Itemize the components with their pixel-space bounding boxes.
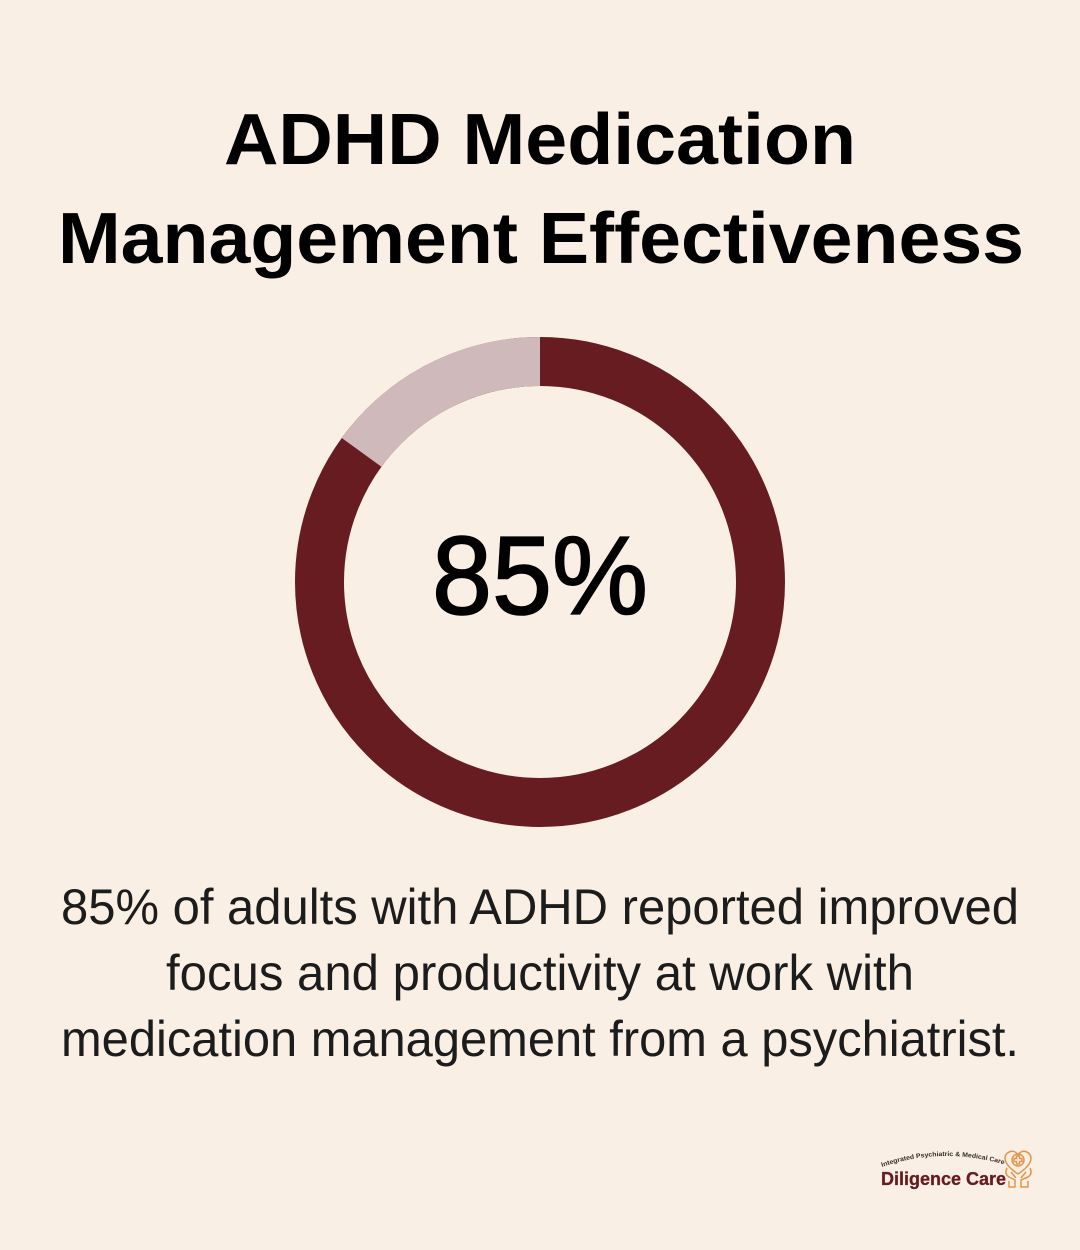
logo: Diligence Care (881, 1150, 1032, 1190)
logo tagline (882, 1156, 1006, 1167)
donut chart: 85% (320, 362, 760, 802)
title: Management Effectiveness (58, 198, 1024, 279)
description text (61, 879, 1019, 1067)
description text: medication management from a psychiatrist. (61, 1011, 1019, 1067)
logo: Diligence Care: Integrated Psychiatric & Medical Care (881, 1151, 1004, 1167)
donut value: 85% (432, 514, 648, 638)
description text: focus and productivity at work with (166, 945, 914, 1001)
logo icon: heart in hands (1005, 1151, 1031, 1187)
description text: 85% of adults with ADHD reported improved (61, 879, 1019, 935)
title (58, 99, 1024, 279)
logo name: Diligence Care (881, 1169, 1006, 1189)
title: ADHD Medication (224, 99, 856, 180)
